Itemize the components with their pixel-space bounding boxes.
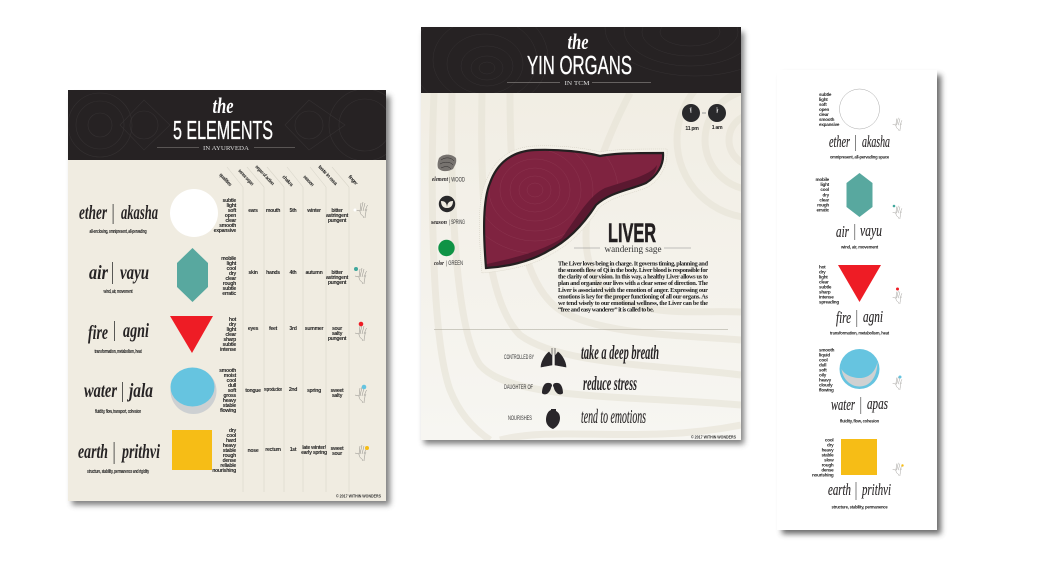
fire qualities: hot: [229, 317, 237, 323]
column headers: [218, 164, 359, 188]
air qualities: dry: [229, 271, 236, 277]
subheading: wandering sage: wandering sage: [604, 244, 662, 254]
ether qualities: subtle: [223, 198, 236, 204]
water qualities: soft: [819, 368, 827, 372]
air qualities: clear: [225, 276, 236, 282]
element: wood: | WOOD: [449, 178, 465, 184]
air qualities: light: [227, 261, 237, 267]
panel: yin organs poster: [420, 27, 748, 448]
column headers: qualities: [218, 172, 233, 188]
air qualities: rough: [223, 281, 236, 287]
earth table values: 1st: [290, 447, 297, 453]
fire name: fire: [836, 308, 851, 327]
earth qualities: dry: [827, 442, 834, 448]
color: green: color: [434, 261, 445, 267]
ether qualities: clear: [819, 112, 829, 117]
earth qualities: rough: [822, 462, 834, 468]
water shape: blue circle: [170, 368, 216, 414]
fire qualities: clear: [819, 280, 829, 284]
fire name: [836, 307, 883, 327]
heading: the: the: [568, 29, 589, 54]
column headers: sense organ: [237, 168, 255, 187]
season: spring: [430, 196, 465, 226]
illustration: liver: [479, 146, 668, 274]
water description: fluidity, flow, cohesion: [840, 418, 879, 424]
ether table values: 5th: [290, 208, 297, 214]
earth qualities: nourishing: [812, 472, 834, 478]
earth qualities: cool: [227, 433, 237, 439]
earth name: [78, 441, 160, 475]
air table values: autumn: [306, 270, 323, 276]
air name: wind, air, movement: [103, 289, 133, 295]
water qualities: heavy: [223, 398, 236, 404]
water qualities: liquid: [819, 352, 830, 358]
column headers: finger: [347, 174, 359, 187]
air table values: 4th: [290, 270, 297, 276]
earth qualities: dense: [821, 468, 834, 472]
air table values: astringent: [326, 275, 349, 281]
water qualities: dull: [819, 362, 826, 368]
air qualities: cool: [820, 187, 829, 192]
water qualities: soft: [228, 388, 237, 394]
element: wood: [432, 155, 465, 184]
water qualities: heavy: [819, 378, 832, 382]
ether name: [829, 132, 890, 151]
column headers: organ of action: [254, 164, 275, 187]
earth qualities: dry: [229, 428, 236, 434]
earth name: earth: [828, 480, 851, 499]
water name: apas: [867, 394, 888, 413]
water name: [84, 380, 153, 415]
ether table values: pungent: [328, 218, 347, 224]
earth qualities: dense: [222, 458, 236, 464]
earth table values: [248, 445, 344, 457]
air hexagon: [846, 173, 872, 217]
earth finger icon: [355, 445, 369, 461]
air qualities: clear: [819, 198, 829, 202]
earth shape: yellow square: [172, 430, 212, 470]
air description: wind, air, movement: [840, 244, 879, 250]
ether qualities: light: [227, 203, 237, 209]
air qualities: dry: [822, 192, 830, 198]
earth table values: late winter/: [302, 445, 327, 451]
header: 5 elements: [68, 89, 401, 161]
fire qualities: light: [819, 274, 828, 280]
ether table values: bitter: [331, 208, 343, 214]
ether table values: ears: [248, 208, 258, 214]
ether qualities: clear: [225, 218, 236, 224]
fire name: agni: [123, 320, 149, 342]
earth qualities: slow: [824, 458, 834, 462]
subheading: in tcm: IN TCM: [564, 80, 590, 87]
water table values: salty: [332, 393, 343, 399]
copyright: © 2017 WITHIN WONDERS: [691, 434, 736, 440]
text block: liver description: the clarity of our vision. In this way, a healthy Liver allows us to: [558, 274, 708, 281]
fire qualities: dry: [229, 322, 236, 328]
fire table values: sour: [332, 326, 342, 332]
earth qualities: cool: [825, 438, 834, 442]
earth qualities: nourishing: [212, 468, 236, 474]
air qualities: rough: [817, 202, 829, 208]
fire qualities: dry: [819, 270, 826, 274]
water qualities: moist: [224, 373, 237, 379]
ether qualities: light: [819, 97, 828, 102]
row: water: [84, 368, 366, 415]
element: wood: element: [432, 177, 448, 183]
earth table values: rectum: [265, 447, 281, 453]
copyright: © 2017 WITHIN WONDERS: [336, 492, 381, 498]
water qualities: cloudy: [819, 382, 833, 388]
air name: vayu: [860, 221, 882, 240]
earth description: structure, stability, permanence: [832, 504, 888, 510]
earth table values: sour: [332, 451, 342, 457]
row: controlled by lung: CONTROLLED BY: [504, 354, 534, 361]
earth qualities: heavy: [223, 443, 236, 449]
fire table values: eyes: [248, 326, 259, 332]
water finger icon: [893, 376, 902, 390]
earth qualities: heavy: [822, 448, 834, 452]
fire table values: summer: [305, 326, 323, 332]
earth qualities: reliable: [220, 463, 236, 469]
heading: yin organs: YIN ORGANS: [527, 50, 632, 80]
water qualities: stable: [223, 403, 236, 409]
air name: vayu: [120, 262, 149, 284]
water qualities: gross: [223, 393, 236, 399]
strip: fire: [819, 264, 902, 336]
color: green: | GREEN: [446, 261, 463, 267]
fire qualities: intense: [819, 294, 834, 300]
water qualities: smooth: [219, 368, 236, 374]
fire qualities: sharp: [819, 290, 831, 294]
water name: [831, 394, 888, 414]
earth name: [828, 480, 891, 500]
panel: 5 elements poster: [68, 89, 401, 505]
ether qualities: smooth: [819, 117, 835, 122]
icon: kidneys: [542, 383, 563, 394]
row: controlled by lung: [504, 342, 659, 367]
row: nourishes heart: NOURISHES: [508, 415, 532, 422]
air qualities: subtle: [223, 286, 236, 292]
row: fire: [88, 316, 366, 355]
fire qualities: spreading: [819, 300, 839, 304]
strip: earth: [812, 438, 904, 510]
earth name: earth: [78, 441, 108, 463]
air finger icon: [354, 267, 366, 284]
text block: liver description: Liver is associated with the emotion of anger. Expressing our: [558, 287, 708, 294]
ether description: omnipresent, all-pervading space: [830, 154, 890, 160]
air name: air: [89, 262, 108, 284]
water table values: sweet: [331, 388, 344, 394]
row: air: [89, 248, 366, 302]
earth qualities: stable: [822, 452, 834, 458]
water circle with crescent: [840, 349, 880, 389]
clocks: 11 pm to 1 am: 1 am: [712, 125, 723, 131]
ether qualities: expansive: [819, 122, 840, 127]
table column rules: [227, 167, 349, 492]
color: green: [434, 240, 463, 267]
panel: elements strip: [777, 70, 941, 534]
subheading: in ayurveda: [157, 145, 295, 152]
clocks: 11 pm to 1 am: [682, 104, 726, 132]
water qualities: cool: [819, 358, 828, 362]
water table values: [245, 387, 344, 399]
fire table values: salty: [332, 331, 343, 337]
ether name: [79, 202, 158, 235]
panel: yin organs poster: tend to emotions: [581, 406, 646, 428]
water table values: tongue: [245, 388, 261, 394]
fire qualities: subtle: [819, 284, 832, 290]
heading: liver: LIVER: [608, 218, 656, 248]
earth name: prithvi: [121, 441, 160, 463]
row: daughter of kidney: [504, 373, 637, 395]
fire triangle: [838, 265, 881, 302]
header: yin organs: [421, 27, 741, 93]
air qualities: light: [820, 182, 830, 187]
fire shape: red triangle: [170, 316, 213, 353]
row: nourishes heart: [508, 406, 646, 429]
ether name: akasha: [121, 202, 158, 224]
column headers: taste in rasa: [317, 164, 338, 187]
ether table values: mouth: [266, 208, 280, 214]
fire table values: feet: [269, 326, 278, 332]
fire qualities: light: [227, 327, 237, 333]
fire name: agni: [863, 307, 883, 326]
ether qualities: open: [819, 107, 830, 112]
ether qualities: soft: [819, 102, 827, 107]
strip: air: [816, 173, 902, 250]
fire qualities: clear: [225, 332, 236, 338]
air table values: skin: [248, 270, 258, 276]
fire qualities: hot: [819, 264, 826, 270]
water qualities: cool: [227, 378, 237, 384]
water qualities: smooth: [819, 348, 835, 352]
ether finger icon: [354, 202, 368, 218]
season: spring: season: [430, 220, 448, 226]
fire table values: 3rd: [289, 326, 297, 332]
row: daughter of kidney: DAUGHTER OF: [504, 384, 533, 391]
water name: jala: [127, 380, 153, 402]
subheading: in ayurveda: IN AYURVEDA: [203, 145, 249, 152]
fire name: [88, 320, 149, 355]
air finger icon: [893, 205, 902, 219]
air qualities: erratic: [222, 291, 236, 297]
column headers: season: [302, 174, 315, 188]
ether name: all-enclosing, omnipresent, all-pervading: [90, 229, 147, 235]
fire name: transformation, metabolism, heat: [94, 349, 142, 355]
ether qualities: open: [225, 213, 236, 219]
air table values: [248, 270, 349, 286]
ether qualities: expansive: [214, 228, 236, 234]
earth qualities: rough: [223, 453, 236, 459]
ether table values: winter: [306, 208, 321, 214]
heading: 5 elements: 5 ELEMENTS: [173, 115, 273, 145]
icon: heart: [546, 409, 560, 429]
water name: fluidity, flow, transport, cohesion: [95, 409, 141, 415]
earth name: prithvi: [861, 480, 891, 499]
water qualities: flowing: [819, 388, 834, 392]
earth table values: nose: [248, 448, 259, 454]
fire qualities: intense: [220, 347, 236, 353]
fire table values: pungent: [328, 336, 347, 342]
row: daughter of kidney: reduce stress: [583, 373, 637, 395]
water qualities: dull: [228, 383, 237, 389]
ether qualities: subtle: [819, 92, 832, 97]
ether qualities: smooth: [219, 223, 236, 229]
air shape: hexagon: [177, 248, 208, 302]
water qualities: oily: [819, 372, 827, 378]
air qualities: erratic: [816, 208, 830, 212]
ether name: ether: [79, 202, 107, 224]
text block: liver description: The Liver loves being in charge. It governs timing, planning and: [558, 260, 708, 268]
row: earth: [78, 428, 369, 475]
text block: liver description: plan and organize our lives with a clear sense of direction. The: [558, 280, 708, 287]
text block: liver description: the smooth flow of Qi in the body. Liver blood is responsible for: [558, 267, 708, 274]
water qualities: flowing: [220, 408, 236, 414]
ether finger icon: [893, 118, 902, 131]
air table values: hands: [266, 270, 280, 276]
ether qualities: soft: [228, 208, 237, 214]
ether outline circle: [840, 89, 880, 129]
strip: ether: [819, 89, 902, 160]
air qualities: mobile: [221, 256, 236, 262]
strip: water: [819, 348, 902, 424]
fire qualities: sharp: [223, 337, 236, 343]
earth qualities: stable: [223, 448, 236, 454]
column headers: chakra: [281, 174, 294, 188]
fire table values: [248, 326, 347, 342]
subheading: wandering sage: [574, 244, 691, 254]
ether shape: white circle: [170, 189, 218, 237]
row: controlled by lung: take a deep breath: [581, 342, 659, 364]
clocks: 11 pm to 1 am: 11 pm: [685, 126, 699, 132]
heading: the: the: [212, 93, 234, 118]
air qualities: mobile: [816, 177, 830, 182]
ether name: ether: [829, 132, 850, 151]
text block: liver description: [558, 260, 708, 314]
air name: [89, 262, 149, 295]
water finger icon: [355, 385, 366, 403]
air name: air: [836, 222, 849, 241]
fire qualities: subtle: [223, 342, 236, 348]
text block: liver description: emotions is key for the proper functioning of all our organs. As: [558, 293, 708, 300]
water name: water: [831, 395, 855, 414]
icon: lungs: [541, 348, 566, 367]
text block: liver description: we tend wisely to our emotional wellness, the Liver can be the: [558, 300, 708, 307]
fire description: transformation, metabolism, heat: [830, 330, 890, 336]
season: spring: | SPRING: [449, 220, 465, 226]
earth finger icon: [893, 463, 904, 476]
earth qualities: hard: [226, 438, 236, 444]
ether table values: astringent: [326, 213, 349, 219]
earth table values: sweet: [331, 446, 344, 452]
water table values: reproduction: [264, 387, 282, 393]
earth name: structure, stability, permanence and rigidity: [87, 469, 149, 475]
earth square: [841, 439, 877, 475]
air name: [836, 221, 882, 241]
air qualities: cool: [227, 266, 237, 272]
earth table values: early spring: [301, 450, 327, 456]
fire name: fire: [88, 322, 108, 344]
fire finger icon: [893, 288, 902, 304]
water name: water: [84, 380, 117, 402]
water table values: 2nd: [289, 387, 297, 393]
ether name: akasha: [862, 132, 890, 151]
air table values: bitter: [331, 270, 343, 276]
text block: liver description: “free and easy wanderer” it is called to be.: [558, 306, 654, 314]
air table values: pungent: [328, 280, 347, 286]
fire finger icon: [355, 322, 366, 341]
water table values: spring: [307, 388, 321, 394]
row: ether: [79, 189, 368, 237]
ether table values: [248, 208, 349, 224]
